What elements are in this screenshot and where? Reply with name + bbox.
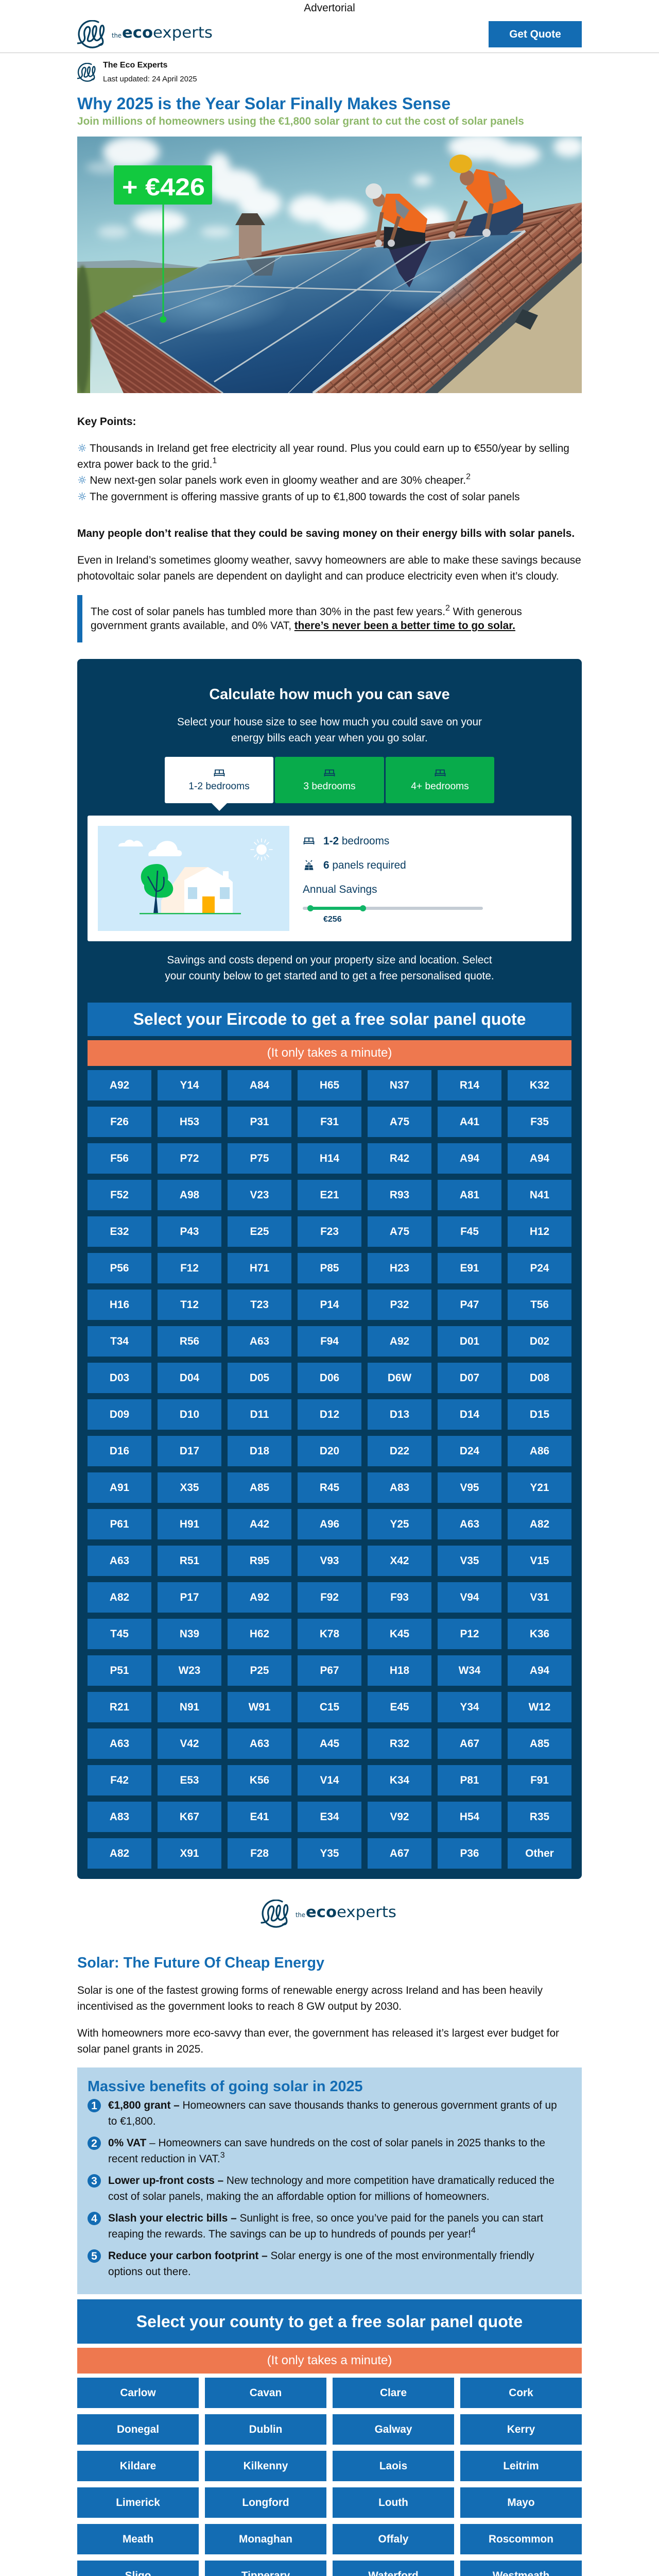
author avatar icon (77, 63, 96, 82)
logo: the eco experts (middle): eco (306, 1903, 337, 1921)
benefit 5 number (88, 2249, 101, 2263)
eircode button grid: T56 (530, 1298, 549, 1311)
county button grid: Longford (242, 2497, 289, 2508)
result: panels required: 6 panels required (323, 859, 406, 871)
eircode button grid: D05 (250, 1371, 269, 1384)
logo: the eco experts (77, 20, 213, 48)
illustration: house, tree, clouds and sun (98, 826, 289, 931)
eircode button grid: F91 (530, 1774, 549, 1786)
eircode button grid: A84 (250, 1079, 269, 1091)
result: savings value: €256 (323, 915, 342, 924)
key points list (77, 442, 569, 503)
eircode button grid: W12 (529, 1701, 550, 1713)
eircode button grid: D20 (320, 1445, 339, 1457)
eircode button grid: H12 (530, 1225, 549, 1238)
heading: key points: Key Points: (77, 416, 136, 428)
eircode button grid: A85 (530, 1737, 549, 1750)
eircode button grid: V31 (530, 1591, 549, 1603)
benefit 1 text: to €1,800. (108, 2115, 156, 2127)
eircode button grid: V93 (320, 1555, 339, 1566)
label: Advertorial: Advertorial (304, 2, 355, 14)
benefit 4 text: reaping the rewards. The savings can be up to hundreds of pounds per year!4 (108, 2226, 476, 2240)
calculator disclaimer text: your county below to get started and to get a free personalised quote. (165, 970, 494, 982)
tab: 3 bedrooms (275, 757, 384, 803)
eircode button grid: H71 (250, 1262, 269, 1274)
benefit 5 number: 5 (91, 2250, 97, 2262)
eircode button grid: A92 (390, 1335, 409, 1347)
county button grid: Dublin (249, 2424, 282, 2435)
paragraph: largest ever budget: With homeowners more eco-savvy than ever, the government has released it’s largest ever budget for (77, 2027, 559, 2039)
eircode button grid: A86 (530, 1445, 549, 1457)
eircode button grid: P72 (180, 1152, 199, 1164)
eircode button grid: D18 (250, 1445, 269, 1457)
eircode button grid: R32 (390, 1737, 409, 1750)
benefit 2 number: 2 (91, 2138, 97, 2149)
tab: 3 bedrooms: 3 bedrooms (303, 781, 356, 792)
eircode button grid: R45 (320, 1482, 339, 1493)
eircode button grid: T34 (110, 1335, 129, 1347)
eircode button grid: V15 (530, 1555, 549, 1566)
eircode button grid: V35 (460, 1555, 479, 1566)
panel: savings calculator and eircode selector (77, 659, 582, 1879)
icon: solar panel (305, 860, 313, 870)
eircode button grid: C15 (320, 1701, 339, 1713)
eircode button grid: P12 (460, 1628, 479, 1639)
eircode button grid: A75 (390, 1116, 409, 1127)
eircode button grid: Y14 (180, 1079, 199, 1091)
eircode button grid: K34 (390, 1774, 409, 1786)
benefit 5 text (108, 2250, 534, 2278)
eircode button grid: Y35 (320, 1848, 339, 1859)
eircode button grid: E91 (460, 1262, 479, 1274)
banner: it only takes a minute (77, 2348, 582, 2374)
eircode button grid: A82 (110, 1848, 129, 1859)
paragraph: fastest growing renewable (77, 1985, 543, 2012)
eircode button grid: A94 (460, 1152, 479, 1164)
county button grid: Mayo (507, 2497, 535, 2508)
eircode button grid: D08 (530, 1371, 549, 1384)
eircode button grid: R35 (530, 1810, 549, 1823)
paragraph: fastest growing renewable: Solar is one of the fastest growing forms of renewable energy across Ireland and has been heavily (77, 1985, 543, 1996)
benefit 4 number (88, 2212, 101, 2225)
heading bar: select your eircode (88, 1003, 571, 1036)
benefit 3 text: cost of solar panels, making the an affordable option for millions of homeowners. (108, 2191, 490, 2202)
county button grid (77, 2378, 582, 2576)
eircode button grid: X91 (180, 1848, 199, 1859)
eircode button grid: F31 (320, 1116, 339, 1127)
eircode button grid: A63 (460, 1518, 479, 1530)
benefit 4 text (108, 2212, 543, 2240)
logo: the eco experts (middle): the (296, 1911, 305, 1919)
eircode button grid: P47 (460, 1298, 479, 1311)
eircode button grid: R21 (110, 1701, 129, 1713)
county button grid: Roscommon (489, 2533, 553, 2545)
tab: 1-2 bedrooms (selected): 1-2 bedrooms (188, 781, 250, 792)
benefit 4 text: Slash your electric bills – Sunlight is free, so once you’ve paid for the panels you can start (108, 2212, 543, 2224)
button: Get Quote: Get Quote (509, 28, 561, 40)
county button grid: Laois (379, 2460, 407, 2472)
author name: The Eco Experts (103, 61, 167, 70)
logo: the eco experts: the (112, 32, 122, 39)
county button grid: Carlow (120, 2386, 156, 2399)
eircode button grid: Y34 (460, 1701, 479, 1713)
eircode button grid: A85 (250, 1482, 269, 1493)
eircode button grid: R42 (390, 1152, 409, 1164)
eircode button grid: P81 (460, 1774, 479, 1786)
eircode button grid: H14 (320, 1152, 339, 1164)
county button grid: Offaly (378, 2533, 408, 2545)
eircode button grid: E53 (180, 1774, 199, 1786)
county button grid: Louth (378, 2497, 408, 2508)
eircode button grid: R56 (180, 1335, 199, 1347)
eircode button grid: N37 (390, 1079, 409, 1091)
eircode button grid: A41 (460, 1116, 479, 1127)
eircode button grid: D11 (250, 1409, 269, 1420)
banner: it only takes a minute: (It only takes a minute) (267, 2353, 392, 2367)
eircode button grid: A67 (460, 1737, 479, 1750)
eircode button grid: A82 (530, 1518, 549, 1530)
benefit 3 number (88, 2174, 101, 2188)
card: savings result (88, 816, 571, 941)
eircode button grid: W34 (459, 1664, 480, 1676)
eircode button grid: H23 (390, 1262, 409, 1274)
eircode button grid: A92 (250, 1591, 269, 1603)
paragraph: largest ever budget (77, 2027, 559, 2055)
eircode button grid: A83 (390, 1482, 409, 1493)
eircode button grid: V23 (250, 1189, 269, 1200)
banner: it only takes a minute: (It only takes a minute) (267, 1046, 392, 1060)
photo badge: +€426 saving (114, 165, 212, 323)
eircode button grid: P36 (460, 1848, 479, 1859)
eircode button grid: A67 (390, 1848, 409, 1859)
eircode button grid: D10 (180, 1409, 199, 1420)
eircode button grid: P75 (250, 1152, 269, 1164)
hero photo: installers fitting solar panels on tiled roof (77, 137, 582, 393)
eircode button grid: K56 (250, 1774, 269, 1786)
eircode button grid: A82 (110, 1591, 129, 1603)
eircode button grid: P43 (180, 1225, 199, 1238)
eircode button grid: A83 (110, 1810, 129, 1823)
eircode button grid: P24 (530, 1262, 549, 1274)
eircode button grid: D07 (460, 1371, 479, 1384)
eircode button grid: D03 (110, 1371, 129, 1384)
eircode button grid: F35 (530, 1116, 549, 1127)
eircode button grid: F93 (390, 1591, 409, 1603)
eircode button grid: D02 (530, 1335, 549, 1347)
key points list: ☼ New next-gen solar panels work even in gloomy weather and are 30% cheaper.2 (77, 472, 471, 486)
calculator intro text: Select your house size to see how much you could save on your (177, 716, 482, 728)
county button grid: Kildare (120, 2460, 156, 2472)
eircode button grid: N41 (530, 1189, 549, 1200)
blockquote: government grants available, and 0% VAT, there’s never been a better time to go solar. (91, 620, 515, 632)
eircode button grid: P51 (110, 1664, 129, 1676)
title: Why 2025 is the Year Solar Finally Makes Sense (77, 94, 450, 113)
bold statement: Many people don’t realise that they could be saving money on their energy bills with solar panels. (77, 528, 575, 539)
eircode button grid: P32 (390, 1298, 409, 1311)
tab: 4+ bedrooms (386, 757, 494, 803)
eircode button grid: A63 (250, 1737, 269, 1750)
eircode button grid: E25 (250, 1225, 269, 1238)
eircode button grid: P14 (320, 1298, 339, 1311)
calculator heading: Calculate how much you can save (209, 686, 450, 703)
eircode button grid: T23 (250, 1298, 269, 1311)
key points list: extra power back to the grid.1 (77, 456, 217, 470)
eircode button grid: P56 (110, 1262, 129, 1274)
county button grid: Cork (509, 2386, 533, 2399)
county button grid: Meath (123, 2533, 153, 2545)
eircode button grid: K32 (530, 1079, 549, 1091)
icon: bed (304, 838, 314, 844)
benefit 2 number (88, 2137, 101, 2150)
eircode button grid: H91 (180, 1518, 199, 1530)
eircode button grid: K78 (320, 1628, 339, 1639)
county button grid: Donegal (117, 2424, 159, 2435)
eircode button grid: R95 (250, 1555, 269, 1566)
calculator disclaimer text: Savings and costs depend on your property size and location. Select (167, 954, 492, 966)
eircode button grid: X42 (390, 1555, 409, 1566)
heading bar: select your county (77, 2299, 582, 2344)
eircode button grid: D04 (180, 1371, 199, 1384)
eircode button grid: F94 (320, 1335, 339, 1347)
eircode button grid: D01 (460, 1335, 479, 1347)
eircode button grid: N91 (180, 1701, 199, 1713)
heading: solar the future of cheap energy: Solar: The Future Of Cheap Energy (77, 1955, 324, 1971)
eircode button grid: N39 (180, 1628, 199, 1639)
eircode button grid: D15 (530, 1409, 549, 1420)
county button grid: Limerick (116, 2497, 160, 2508)
logo: the eco experts: experts (153, 24, 213, 41)
heading bar: select your county: Select your county to get a free solar panel quote (136, 2312, 523, 2331)
eircode button grid: D17 (180, 1445, 199, 1457)
benefit 1 number: 1 (91, 2100, 97, 2112)
calculator disclaimer text (165, 954, 494, 982)
eircode button grid: V42 (180, 1737, 199, 1750)
county button grid: Monaghan (239, 2533, 292, 2545)
blockquote (77, 595, 582, 642)
logo: the eco experts: eco (122, 24, 153, 41)
eircode button grid: A42 (250, 1518, 269, 1530)
eircode button grid: V14 (320, 1774, 339, 1786)
eircode button grid: D13 (390, 1409, 409, 1420)
eircode button grid: F12 (180, 1262, 199, 1274)
eircode button grid: D06 (320, 1371, 339, 1384)
paragraph: fastest growing renewable: incentivised as the government looks to reach 8 GW output by 2030. (77, 2001, 402, 2012)
eircode button grid: X35 (180, 1482, 199, 1493)
eircode button grid: E45 (390, 1701, 409, 1713)
eircode button grid: F56 (110, 1152, 129, 1164)
photo badge: +€426 saving: + €426 (122, 173, 205, 200)
arrow: selected tab pointer (212, 803, 227, 811)
eircode button grid: R51 (180, 1555, 199, 1566)
benefit 3 number: 3 (91, 2175, 97, 2187)
county button grid: Kilkenny (244, 2460, 288, 2472)
eircode button grid: H53 (180, 1116, 199, 1127)
eircode button grid: R93 (390, 1189, 409, 1200)
eircode button grid: D6W (388, 1371, 411, 1384)
eircode button grid: A92 (110, 1079, 129, 1091)
benefit 1 text: €1,800 grant – Homeowners can save thousands thanks to generous government grants of up (108, 2099, 557, 2111)
county button grid: Galway (375, 2424, 412, 2435)
eircode button grid: K45 (390, 1628, 409, 1639)
button: Get Quote (489, 21, 582, 47)
county button grid: Kerry (507, 2424, 535, 2435)
benefit 3 text (108, 2175, 554, 2202)
eircode button grid: D16 (110, 1445, 129, 1457)
eircode button grid: D24 (460, 1445, 479, 1457)
eircode button grid: A63 (110, 1555, 129, 1566)
paragraph: gloomy weather: Even in Ireland’s sometimes gloomy weather, savvy homeowners are able to make these savings because (77, 554, 581, 566)
eircode button grid: F23 (320, 1225, 339, 1238)
eircode button grid: D12 (320, 1409, 339, 1420)
benefit 2 text: recent reduction in VAT.3 (108, 2151, 225, 2165)
panel: massive benefits (77, 2067, 582, 2294)
eircode button grid: D22 (390, 1445, 409, 1457)
eircode button grid: P25 (250, 1664, 269, 1676)
eircode button grid: P17 (180, 1591, 199, 1603)
eircode button grid: F52 (110, 1189, 129, 1200)
benefit 1 text (108, 2099, 557, 2127)
eircode button grid: V94 (460, 1591, 479, 1603)
paragraph: gloomy weather (77, 554, 581, 582)
eircode button grid: F42 (110, 1774, 129, 1786)
key points list: ☼ Thousands in Ireland get free electricity all year round. Plus you could earn up to €550/year by selling (77, 442, 569, 454)
logo: the eco experts (middle): experts (337, 1903, 396, 1921)
eircode button grid: D14 (460, 1409, 479, 1420)
eircode button grid: P31 (250, 1116, 269, 1127)
eircode button grid: P61 (110, 1518, 129, 1530)
eircode button grid: H62 (250, 1628, 269, 1639)
eircode button grid: T12 (180, 1298, 199, 1311)
eircode button grid: P85 (320, 1262, 339, 1274)
eircode button grid: T45 (110, 1628, 129, 1639)
eircode button grid: A91 (110, 1482, 129, 1493)
eircode button grid: K36 (530, 1628, 549, 1639)
result: bedrooms: 1-2 bedrooms (323, 835, 389, 847)
eircode button grid: F28 (250, 1848, 269, 1859)
calculator intro text: energy bills each year when you go solar. (231, 732, 428, 744)
eircode button grid: W91 (249, 1701, 270, 1713)
result: annual savings label: Annual Savings (303, 884, 377, 895)
eircode button grid: Other (525, 1848, 554, 1859)
eircode button grid: F45 (460, 1225, 479, 1238)
eircode button grid: D09 (110, 1409, 129, 1420)
eircode button grid: Y25 (390, 1518, 409, 1530)
eircode button grid: W23 (179, 1664, 200, 1676)
eircode button grid (88, 1070, 571, 1869)
eircode button grid: A75 (390, 1225, 409, 1238)
eircode button grid: R14 (460, 1079, 479, 1091)
paragraph: gloomy weather: photovoltaic solar panels are dependent on daylight and can produce electricity even when it’s cloudy. (77, 570, 559, 582)
eircode button grid: H65 (320, 1079, 339, 1091)
subtitle: Join millions of homeowners using the €1,800 solar grant to cut the cost of solar panels (77, 115, 524, 127)
benefit 4 number: 4 (91, 2213, 97, 2225)
eircode button grid: H18 (390, 1664, 409, 1676)
slider: annual savings (303, 905, 483, 911)
county button grid: Leitrim (503, 2460, 539, 2472)
eircode button grid: A94 (530, 1664, 549, 1676)
eircode button grid: E34 (320, 1810, 339, 1823)
eircode button grid: A45 (320, 1737, 339, 1750)
tab: 4+ bedrooms: 4+ bedrooms (411, 781, 469, 792)
eircode button grid: V95 (460, 1482, 479, 1493)
county button grid: Cavan (250, 2386, 282, 2399)
eircode button grid: F26 (110, 1116, 129, 1127)
county button grid: Clare (380, 2386, 407, 2399)
calculator intro text (177, 716, 482, 744)
eircode button grid: F92 (320, 1591, 339, 1603)
heading bar: select your eircode: Select your Eircode to get a free solar panel quote (133, 1010, 526, 1028)
eircode button grid: A94 (530, 1152, 549, 1164)
benefit 2 text: 0% VAT – Homeowners can save hundreds on the cost of solar panels in 2025 thanks to the (108, 2137, 545, 2149)
benefit 5 text: Reduce your carbon footprint – Solar energy is one of the most environmentally friendly (108, 2250, 534, 2262)
eircode button grid: A98 (180, 1189, 199, 1200)
eircode button grid: P67 (320, 1664, 339, 1676)
eircode button grid: E41 (250, 1810, 269, 1823)
key points list: ☼ The government is offering massive grants of up to €1,800 towards the cost of solar panels (77, 490, 519, 503)
benefit 3 text: Lower up-front costs – New technology and more competition have dramatically reduced the (108, 2175, 554, 2187)
benefit 1 number (88, 2099, 101, 2112)
eircode button grid: A96 (320, 1518, 339, 1530)
benefit 5 text: options out there. (108, 2266, 191, 2278)
banner: it only takes a minute (88, 1040, 571, 1066)
benefits heading: Massive benefits of going solar in 2025 (88, 2078, 363, 2095)
last updated date: Last updated: 24 April 2025 (103, 75, 197, 83)
eircode button grid: V92 (390, 1810, 409, 1823)
eircode button grid: H16 (110, 1298, 129, 1311)
paragraph: largest ever budget: solar panel grants in 2025. (77, 2043, 203, 2055)
eircode button grid: H54 (460, 1810, 479, 1823)
eircode button grid: K67 (180, 1810, 199, 1823)
benefit 2 text (108, 2137, 545, 2165)
eircode button grid: A81 (460, 1189, 479, 1200)
eircode button grid: Y21 (530, 1482, 549, 1493)
logo: the eco experts (middle) (261, 1900, 396, 1928)
eircode button grid: A63 (110, 1737, 129, 1750)
tab: 1-2 bedrooms (selected) (165, 757, 273, 803)
eircode button grid: E21 (320, 1189, 339, 1200)
blockquote: The cost of solar panels has tumbled more than 30% in the past few years.2 With generous (91, 604, 522, 618)
eircode button grid: A63 (250, 1335, 269, 1347)
eircode button grid: E32 (110, 1225, 129, 1238)
